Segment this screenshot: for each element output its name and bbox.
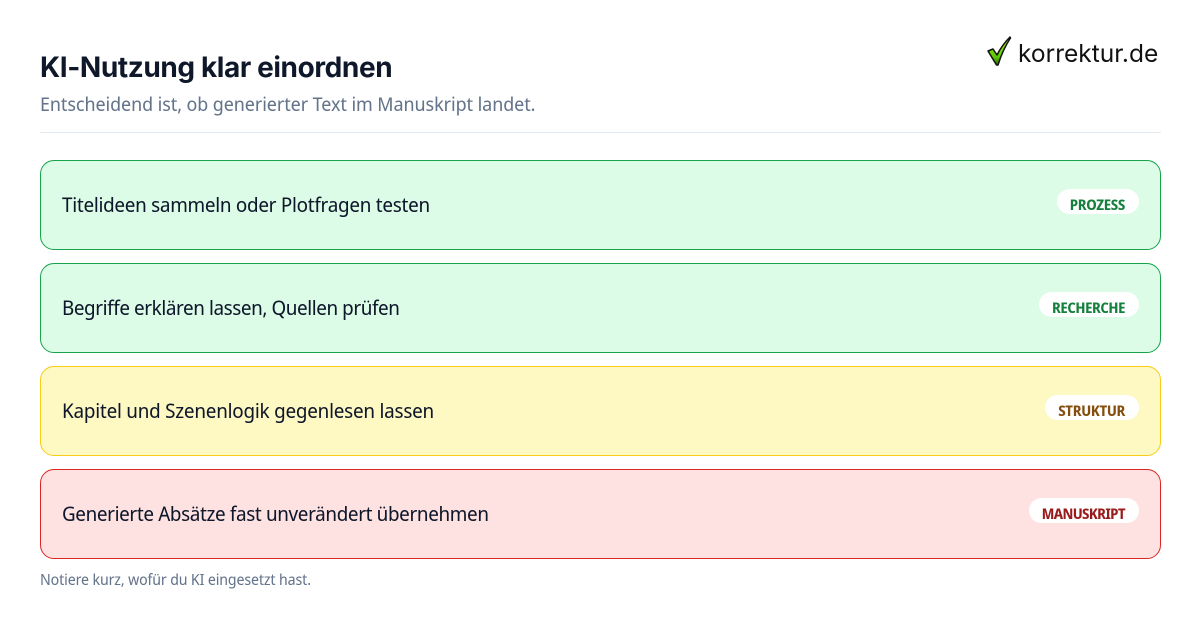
panel: Struktur [40, 366, 1161, 456]
tag: Struktur: STRUKTUR [1058, 402, 1125, 421]
logo: korrektur.de [987, 36, 1158, 68]
tag: Manuskript: MANUSKRIPT [1042, 505, 1125, 524]
row text: Begriffe erklären lassen, Quellen prüfen [62, 294, 400, 321]
tag: Prozess: PROZESS [1070, 196, 1125, 215]
panel: Prozess [40, 160, 1161, 250]
row text: Titelideen sammeln oder Plotfragen testen [62, 191, 430, 218]
icon: green check mark [987, 36, 1012, 66]
footer note: Notiere kurz, wofür du KI eingesetzt hast. [40, 570, 311, 590]
tag: Manuskript [1029, 498, 1139, 523]
tag: Prozess [1057, 189, 1139, 214]
panel: Recherche [40, 263, 1161, 353]
row text: Kapitel und Szenenlogik gegenlesen lassen [62, 397, 434, 424]
row text: Generierte Absätze fast unverändert übernehmen [62, 500, 489, 527]
title: KI-Nutzung klar einordnen [40, 50, 392, 84]
tag: Recherche: RECHERCHE [1052, 299, 1125, 318]
panel: Manuskript [40, 469, 1161, 559]
subtitle: Entscheidend ist, ob generierter Text im Manuskript landet. [40, 91, 535, 117]
divider [40, 132, 1161, 133]
tag: Recherche [1039, 292, 1139, 317]
logo wordmark: korrektur.de [1018, 38, 1158, 68]
tag: Struktur [1045, 395, 1139, 420]
